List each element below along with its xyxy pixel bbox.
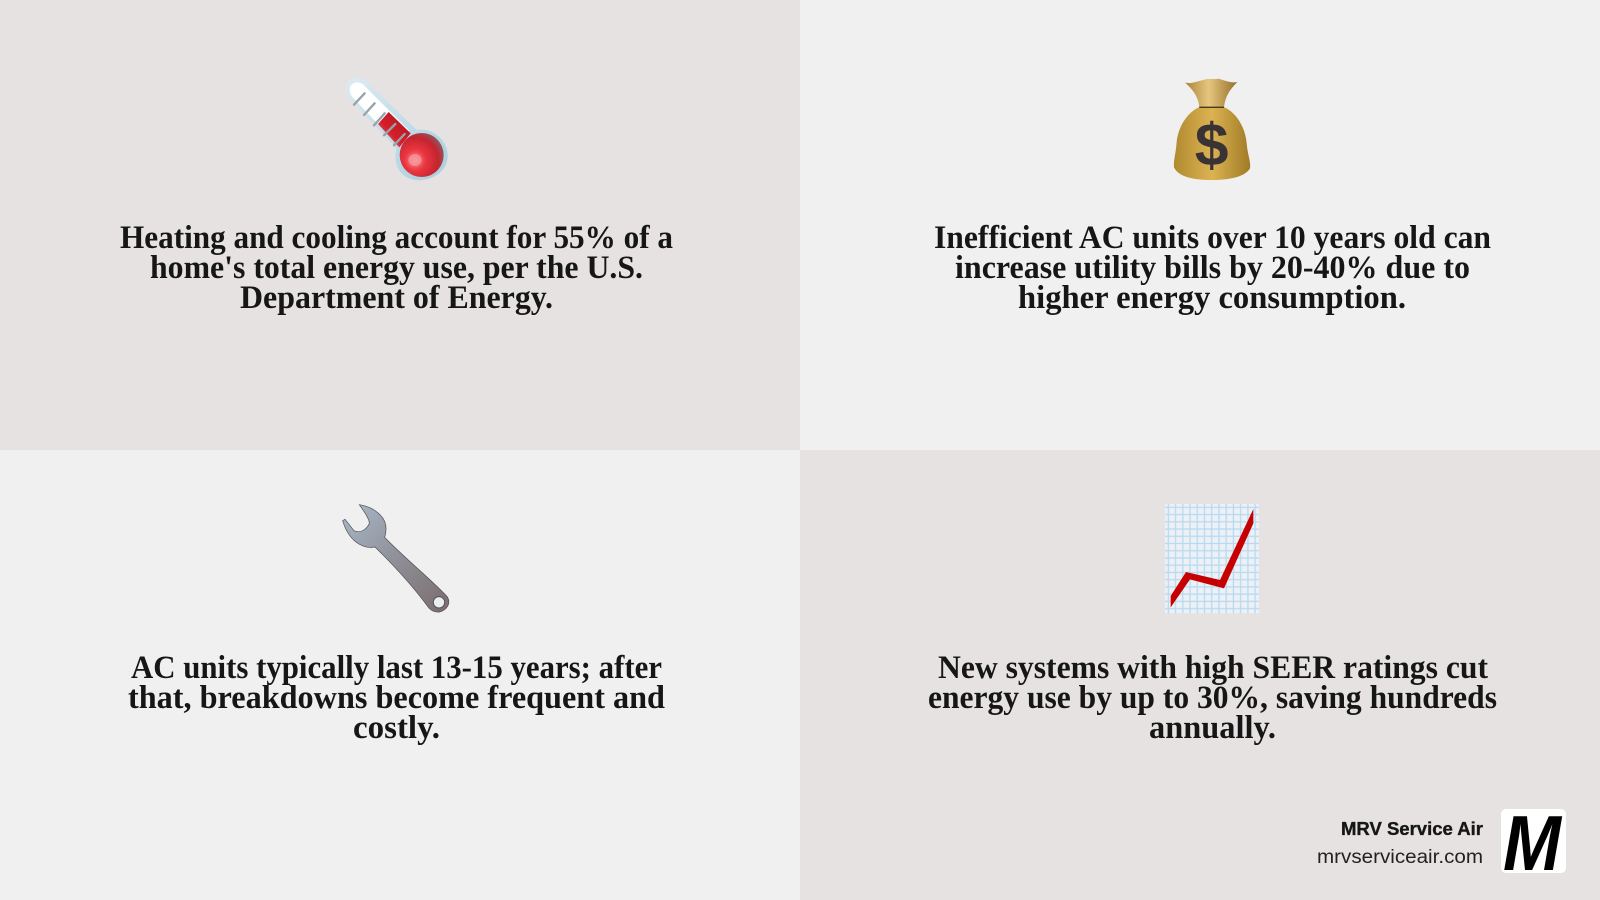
brand website: mrvserviceair.com	[1317, 847, 1483, 868]
text: heating and cooling statement: Heating and cooling account for 55% of a	[120, 220, 673, 256]
icon: thermometer	[346, 78, 448, 180]
icon: money bag	[1174, 79, 1250, 180]
text: SEER statement	[928, 650, 1497, 746]
text: lifespan statement	[128, 650, 665, 746]
text: heating and cooling statement: Department of Energy.	[240, 280, 553, 316]
text: inefficient units statement: Inefficient AC units over 10 years old can	[934, 220, 1491, 256]
text: heating and cooling statement: home's total energy use, per the U.S.	[150, 250, 643, 286]
text: inefficient units statement: higher energy consumption.	[1018, 280, 1406, 316]
brand name: MRV Service Air	[1341, 819, 1483, 839]
text: SEER statement: annually.	[1149, 710, 1276, 746]
panel: SEER savings	[800, 450, 1600, 900]
brand footer	[1317, 799, 1566, 887]
text: lifespan statement: that, breakdowns become frequent and	[128, 680, 665, 716]
text: lifespan statement: costly.	[353, 710, 440, 746]
icon: money bag: $	[1195, 111, 1229, 179]
text: SEER statement: New systems with high SEER ratings cut	[938, 650, 1488, 686]
text: SEER statement: energy use by up to 30%, saving hundreds	[928, 680, 1497, 716]
text: heating and cooling statement	[120, 220, 673, 316]
panel: lifespan and breakdowns	[0, 450, 800, 900]
logo: M mark: M	[1503, 799, 1563, 887]
text: lifespan statement: AC units typically last 13-15 years; after	[131, 650, 662, 686]
panel: heating and cooling share	[0, 0, 800, 450]
icon: rising chart	[1165, 504, 1259, 613]
icon: wrench	[343, 505, 449, 612]
text: inefficient units statement	[934, 220, 1491, 316]
text: inefficient units statement: increase utility bills by 20-40% due to	[955, 250, 1470, 286]
panel: utility bills	[800, 0, 1600, 450]
